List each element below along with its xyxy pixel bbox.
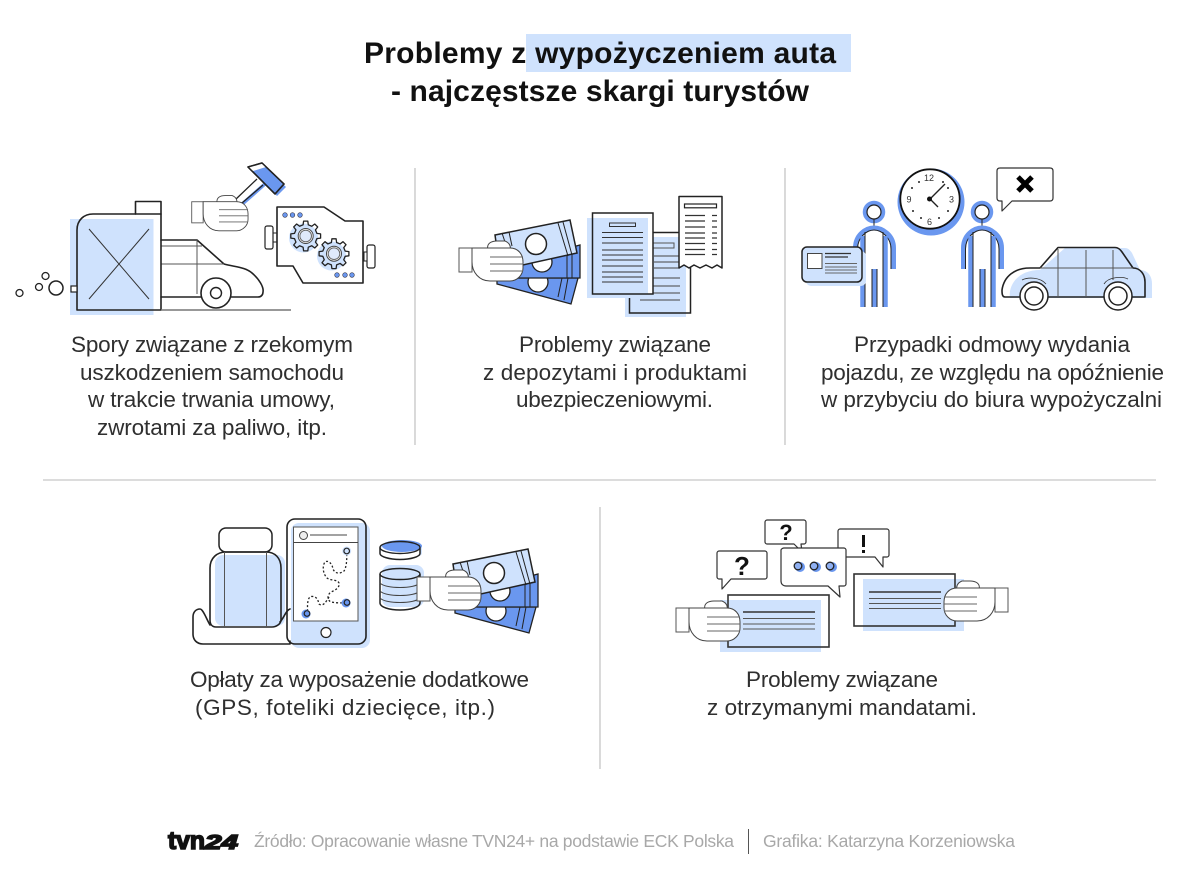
source text: Źródło: Opracowanie własne TVN24+ na podstawie ECK Polska	[254, 831, 734, 851]
logo: tvn24: tvn	[168, 827, 205, 855]
icon: people, clock, speech bubble and car: 9	[906, 194, 912, 204]
text: refusal to release vehicle: w przybyciu do biura wypożyczalni	[820, 387, 1162, 412]
text: extra equipment fees: Opłaty za wyposażenie dodatkowe	[190, 667, 529, 692]
text: refusal to release vehicle	[820, 332, 1164, 412]
text: deposits and insurance: Problemy związane	[519, 332, 711, 357]
icon: people, clock, speech bubble and car: 6	[927, 217, 932, 227]
text: damage disputes: uszkodzeniem samochodu	[80, 360, 344, 385]
text: extra equipment fees	[190, 667, 529, 720]
icon: fuel canister with car, hammer and engine	[16, 163, 375, 315]
panel: damage disputes	[16, 163, 375, 440]
icon: people, clock, speech bubble and car: 3	[949, 194, 954, 204]
panel: refusal to release vehicle	[802, 168, 1164, 412]
icon: people, clock, speech bubble and car	[802, 168, 1152, 310]
text: refusal to release vehicle: pojazdu, ze względu na opóźnienie	[821, 360, 1164, 385]
text: traffic tickets	[707, 667, 977, 720]
icon: hands with documents and speech bubbles	[676, 520, 1008, 652]
text: damage disputes: zwrotami za paliwo, itp.	[97, 415, 327, 440]
icon: hands with documents and speech bubbles: ?	[779, 520, 793, 545]
text: deposits and insurance: z depozytami i produktami	[483, 360, 747, 385]
icon: banknotes, documents and receipt	[459, 196, 722, 317]
icon: people, clock, speech bubble and car: 12	[924, 173, 934, 183]
text: deposits and insurance: ubezpieczeniowymi.	[516, 387, 713, 412]
text: extra equipment fees: (GPS, foteliki dziecięce, itp.)	[195, 695, 495, 720]
text: deposits and insurance	[483, 332, 747, 412]
title: Problemy z wypożyczeniem auta	[364, 37, 836, 70]
text: damage disputes: w trakcie trwania umowy,	[87, 387, 335, 412]
text: damage disputes	[71, 332, 353, 440]
panel: extra equipment fees	[190, 519, 538, 720]
text: traffic tickets: Problemy związane	[746, 667, 938, 692]
author credit: Grafika: Katarzyna Korzeniowska	[763, 831, 1015, 851]
text: refusal to release vehicle: Przypadki odmowy wydania	[854, 332, 1130, 357]
title: - najczęstsze skargi turystów	[391, 75, 810, 108]
footer: logo and source	[168, 827, 1015, 855]
panel: deposits and insurance	[459, 196, 747, 412]
icon: child seat, phone with GPS route, coins and banknotes	[193, 519, 538, 648]
text: traffic tickets: z otrzymanymi mandatami.	[707, 695, 977, 720]
title	[364, 34, 851, 108]
icon: hands with documents and speech bubbles: ?	[734, 551, 750, 581]
panel: traffic tickets	[676, 520, 1008, 720]
logo: tvn24: 24	[204, 832, 238, 854]
text: damage disputes: Spory związane z rzekomym	[71, 332, 353, 357]
logo: tvn24	[168, 827, 238, 855]
